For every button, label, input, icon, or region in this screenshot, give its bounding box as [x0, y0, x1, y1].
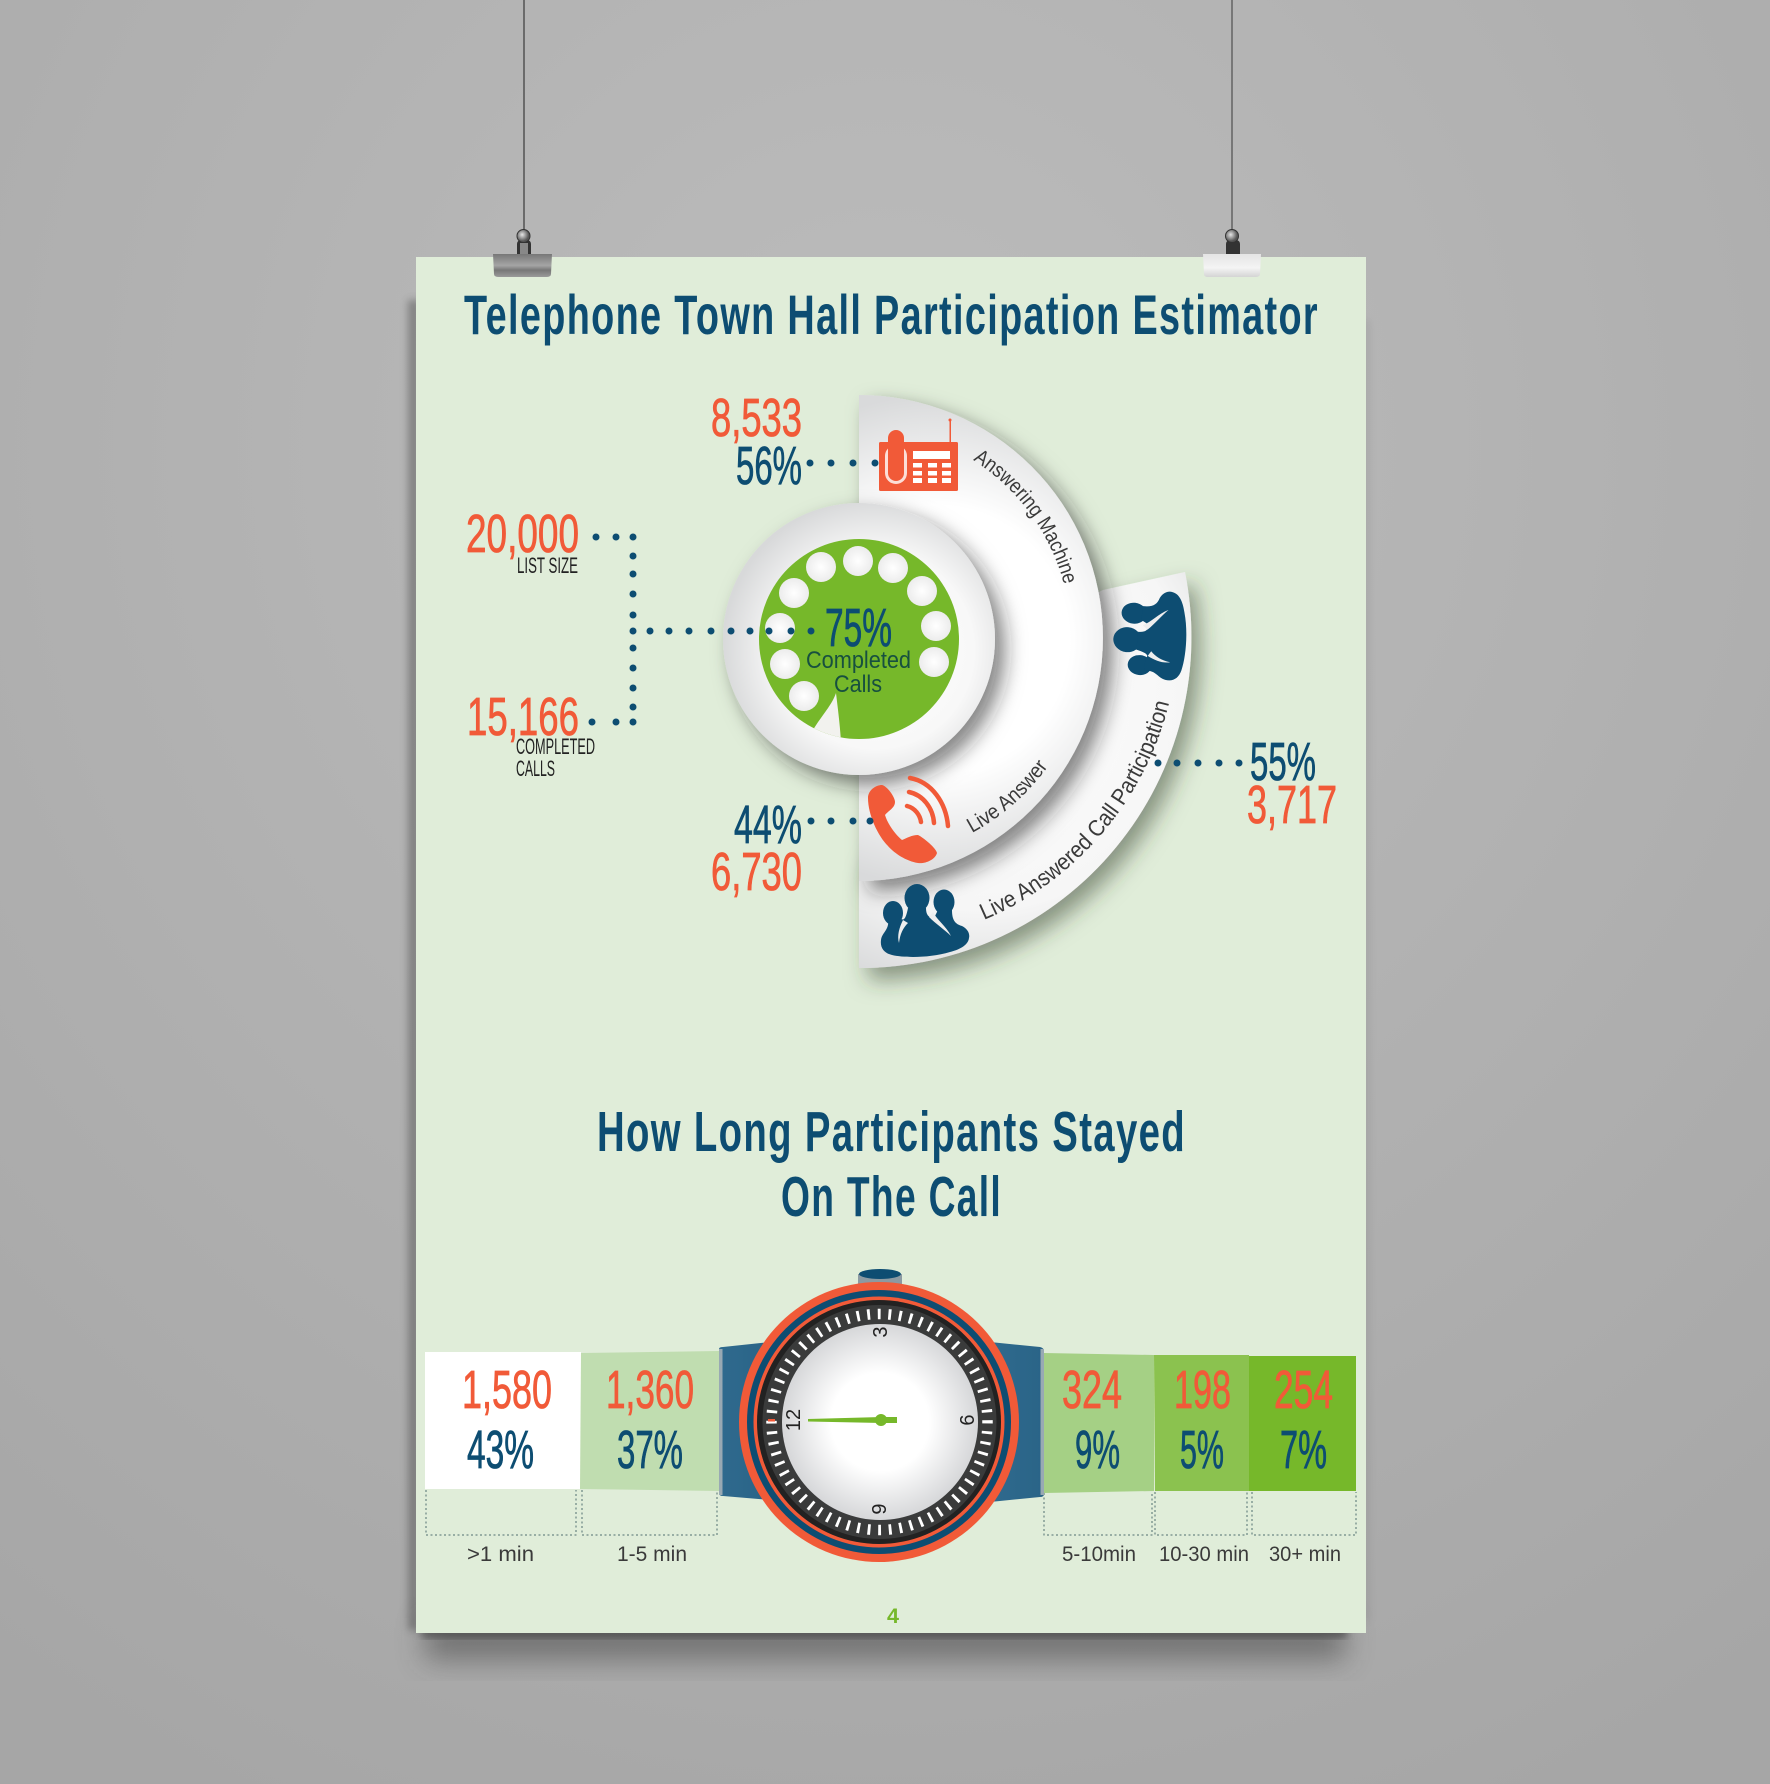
stat block: under 1 min: 43% — [467, 1420, 534, 1480]
hour numerals — [783, 1326, 979, 1515]
dotted connectors — [588, 460, 1242, 824]
stat: 20,000 list size — [466, 504, 579, 578]
middle half disc: answering machine and live answer — [859, 395, 1103, 881]
band: 1-5 min — [580, 1351, 719, 1491]
stat: 55% / 3,717 participation: 55% — [1250, 732, 1316, 792]
icon: ringing phone — [868, 778, 948, 863]
page number: 4 — [887, 1605, 899, 1628]
stat block: 30+ min: 254 — [1274, 1360, 1333, 1420]
dotted brackets — [426, 1490, 1356, 1535]
watch — [719, 1269, 1044, 1562]
stat: 44% / 6,730 live answer — [711, 795, 802, 902]
duration labels: >1 min — [467, 1543, 534, 1566]
stat block: 5-10 min — [1062, 1360, 1122, 1480]
left hanging wire and clip — [493, 0, 552, 277]
stat: 8,533 / 56% answering machine — [711, 388, 802, 496]
outer arc: live answered call participation — [859, 572, 1191, 968]
title: Telephone Town Hall Participation Estimator — [464, 283, 1319, 346]
band: 30+ min — [1249, 1356, 1356, 1491]
curved label: live answer: Live Answer — [966, 760, 1046, 832]
hour numerals: 12 — [783, 1409, 805, 1431]
stat block: 10-30 min: 198 — [1174, 1360, 1231, 1420]
crown — [858, 1269, 902, 1286]
stat block: 5-10 min: 324 — [1062, 1360, 1122, 1420]
icon: fax machine — [879, 418, 958, 491]
stat: 15,166 completed calls — [467, 687, 595, 781]
icon: people group top right — [1110, 586, 1191, 682]
panel: participation dial — [719, 392, 1216, 994]
stat block: under 1 min — [462, 1360, 552, 1480]
icon: people group bottom — [881, 884, 969, 957]
stat: 20,000 list size: LIST SIZE — [517, 553, 578, 578]
stat: 15,166 completed calls: COMPLETED — [516, 734, 595, 759]
band: under 1 min — [425, 1352, 581, 1489]
curved label: live answered call participation: Live Answered Call Participation — [979, 702, 1169, 920]
stat: 8,533 / 56% answering machine: 56% — [736, 436, 802, 496]
curved label: answering machine: Answering Machine — [973, 450, 1074, 583]
orange 12 marker — [768, 1419, 775, 1422]
strap — [719, 1342, 1044, 1502]
rotary dial face — [759, 539, 959, 742]
center stat: 75% completed calls: Completed — [806, 647, 911, 674]
duration labels — [467, 1543, 1341, 1566]
hour numerals: 3 — [870, 1326, 892, 1338]
stat: 20,000 list size: 20,000 — [466, 504, 579, 564]
section heading: On The Call — [781, 1165, 1002, 1229]
stat block: 1-5 min: 1,360 — [606, 1360, 694, 1420]
right hanging wire and clip — [1203, 0, 1261, 277]
stat block: 1-5 min: 37% — [617, 1420, 683, 1480]
hour numerals: 6 — [957, 1414, 979, 1426]
stat block: 30+ min: 7% — [1280, 1420, 1327, 1480]
stat block: 10-30 min: 5% — [1180, 1420, 1224, 1480]
case rings — [739, 1282, 1019, 1562]
stat: 15,166 completed calls: 15,166 — [467, 687, 579, 747]
stat block: 10-30 min — [1174, 1360, 1231, 1480]
poster sheet — [416, 257, 1366, 1633]
center stat: 75% completed calls: Calls — [834, 671, 882, 698]
center disc — [723, 503, 995, 775]
duration labels: 10-30 min — [1159, 1543, 1249, 1566]
tick marks — [772, 1314, 988, 1530]
stat: 55% / 3,717 participation: 3,717 — [1247, 775, 1337, 835]
dial — [782, 1324, 978, 1520]
center stat: 75% completed calls — [806, 598, 911, 698]
section heading: How Long Participants Stayed — [597, 1100, 1186, 1164]
section heading — [597, 1100, 1186, 1229]
stat block: 1-5 min — [606, 1360, 694, 1480]
duration labels: 5-10min — [1062, 1543, 1136, 1566]
stat: 8,533 / 56% answering machine: 8,533 — [711, 388, 802, 448]
duration labels: 30+ min — [1269, 1543, 1341, 1566]
band: 5-10 min — [1044, 1353, 1154, 1493]
center stat: 75% completed calls: 75% — [825, 598, 892, 658]
hand — [808, 1414, 897, 1426]
stat: 55% / 3,717 participation — [1247, 732, 1337, 835]
stat block: 30+ min — [1274, 1360, 1333, 1480]
stat: 15,166 completed calls: CALLS — [516, 756, 555, 781]
hour numerals: 9 — [869, 1503, 891, 1515]
stat: 44% / 6,730 live answer: 44% — [734, 795, 802, 855]
stat block: under 1 min: 1,580 — [462, 1360, 552, 1420]
poster shadow — [408, 300, 1370, 1660]
band: 10-30 min — [1154, 1355, 1249, 1491]
stat: 44% / 6,730 live answer: 6,730 — [711, 842, 802, 902]
duration labels: 1-5 min — [617, 1543, 687, 1566]
stat block: 5-10 min: 9% — [1075, 1420, 1120, 1480]
